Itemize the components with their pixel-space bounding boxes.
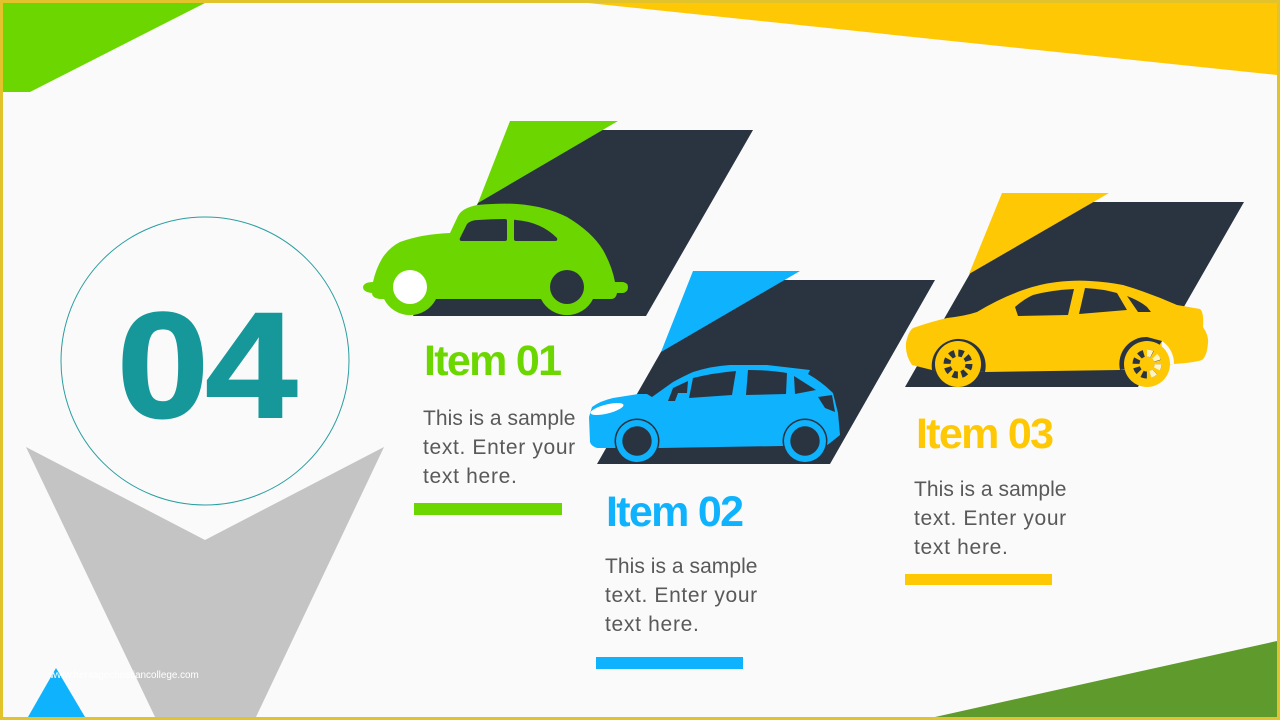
bottom-right green corner: [935, 641, 1277, 717]
panel: item 02 graphic: [589, 271, 935, 464]
accent bar: item 01: [414, 503, 562, 515]
watermark: www.heritagechristiancollege.com: [49, 670, 199, 681]
heading: item 02: Item 02: [606, 488, 743, 536]
heading: item 03: Item 03: [916, 410, 1053, 458]
text block: item 02: text. Enter your: [605, 584, 758, 607]
text block: item 01: text. Enter your: [423, 436, 576, 459]
text block: item 01: text here.: [423, 465, 518, 488]
icon: yellow sedan car: [906, 281, 1208, 387]
text block: item 03: text. Enter your: [914, 507, 1067, 530]
accent bar: item 03: [905, 574, 1052, 585]
top-left green corner: [3, 3, 205, 92]
text block: item 03: text here.: [914, 536, 1009, 559]
number 04: 04: [117, 282, 296, 449]
text block: item 02: text here.: [605, 613, 700, 636]
icon: green beetle car: [363, 204, 628, 315]
panel: item 03 graphic: [905, 193, 1244, 387]
accent bar: item 02: [596, 657, 743, 669]
grey chevron: [26, 447, 384, 717]
icon: blue hatchback car: [589, 365, 840, 464]
text block: item 02: This is a sample: [605, 555, 758, 578]
text block: item 03: This is a sample: [914, 478, 1067, 501]
blue corner triangle: [28, 668, 85, 717]
top-right yellow corner: [588, 3, 1277, 75]
panel: item 01 graphic: [363, 121, 753, 316]
number circle: [61, 217, 349, 505]
text block: item 01: This is a sample: [423, 407, 576, 430]
heading: item 01: Item 01: [424, 337, 561, 385]
